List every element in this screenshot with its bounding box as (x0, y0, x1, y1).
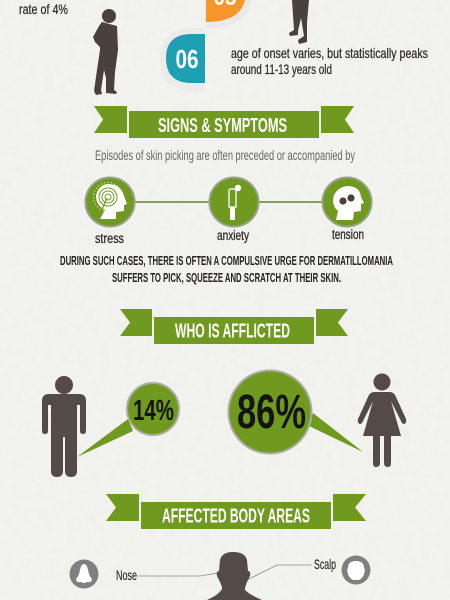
heading ribbon: affected body areas: AFFECTED BODY AREAS (162, 506, 310, 528)
callout: 86 percent: 86% (237, 386, 306, 439)
icon: woman (358, 374, 406, 467)
icon: tension (322, 178, 372, 226)
text: age of onset: around 11-13 years old (231, 61, 332, 77)
leader line: nose (138, 573, 218, 576)
text: rate of 4%: rate of 4% (19, 1, 68, 17)
heading ribbon: signs and symptoms (94, 106, 354, 138)
text: age of onset (231, 45, 428, 77)
icon: anxiety (210, 178, 258, 226)
icon: scalp (342, 556, 370, 584)
icon: head and shoulders silhouette (207, 552, 262, 600)
label: scalp: Scalp (314, 556, 336, 572)
badge: 05 orange (206, 0, 251, 28)
icon: stress (86, 178, 134, 226)
label: nose: Nose (116, 567, 137, 583)
icon: nose (70, 560, 98, 588)
label: stress: stress (95, 231, 124, 246)
callout: 14 percent: 14% (133, 395, 174, 427)
badge: 06 teal: 06 (176, 44, 198, 74)
heading ribbon: who is afflicted: WHO IS AFFLICTED (175, 320, 290, 342)
callout: 86 percent (228, 370, 363, 454)
icon: boy silhouette (93, 9, 118, 95)
label: tension: tension (332, 227, 364, 242)
badge: 06 teal (160, 28, 205, 91)
heading ribbon: affected body areas (106, 494, 366, 529)
connector line (130, 201, 330, 203)
leader line: scalp (213, 565, 312, 600)
callout: 14 percent (77, 383, 179, 457)
icon: man (42, 376, 86, 477)
heading ribbon: who is afflicted (120, 309, 348, 344)
icon: man silhouette (289, 0, 309, 44)
heading ribbon: signs and symptoms: SIGNS & SYMPTOMS (158, 115, 287, 137)
label: anxiety: anxiety (217, 228, 249, 243)
text: compulsive urge (60, 253, 393, 285)
